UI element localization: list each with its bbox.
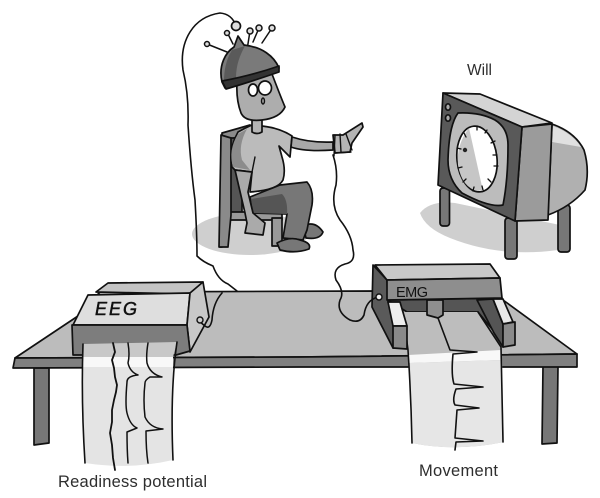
clock shaded part bbox=[458, 128, 483, 191]
table front edge bbox=[13, 354, 577, 368]
EEG noisy trace bbox=[110, 343, 117, 470]
chair seat bbox=[230, 212, 282, 220]
EMG left arm block bbox=[393, 326, 407, 349]
helmet dome bbox=[221, 36, 279, 88]
table bbox=[13, 291, 577, 445]
EMG trace bbox=[438, 318, 483, 450]
sensor heads bbox=[204, 42, 210, 46]
table left leg bbox=[34, 368, 49, 445]
TV shadow bbox=[420, 202, 560, 252]
table right leg bbox=[542, 366, 558, 444]
EEG readiness trace 2 bbox=[144, 343, 163, 463]
paper edges bbox=[82, 342, 177, 463]
TV side bbox=[515, 124, 552, 221]
head bbox=[237, 74, 285, 120]
clock ticks bbox=[457, 126, 498, 191]
EEG paper strip bbox=[82, 342, 177, 470]
EEG box top bbox=[73, 293, 190, 325]
back shoe bbox=[303, 224, 323, 238]
label: Readiness potential: Readiness potential bbox=[58, 473, 207, 491]
chair back bbox=[220, 125, 252, 247]
table top surface bbox=[15, 291, 577, 358]
helmet top ball bbox=[232, 22, 240, 30]
strapped hand bbox=[333, 123, 363, 153]
EMG label: EMG bbox=[396, 285, 428, 301]
EEG label: EEG bbox=[95, 299, 137, 319]
EEG readiness trace 1 bbox=[126, 343, 138, 463]
EMG paper edges bbox=[403, 312, 503, 443]
helmet sensors bbox=[204, 25, 275, 52]
thigh shade bbox=[251, 194, 287, 214]
television with clock bbox=[438, 93, 587, 259]
EEG box back strip bbox=[96, 282, 203, 294]
sensor stalks bbox=[207, 28, 272, 52]
TV front bbox=[438, 93, 522, 221]
lower arm bbox=[235, 170, 265, 235]
chair bbox=[219, 125, 282, 247]
clock face bbox=[454, 124, 500, 194]
paper upper part bbox=[82, 342, 177, 357]
EMG right arm block bbox=[503, 322, 515, 347]
EMG paper strip bbox=[403, 312, 504, 447]
EMG paper lower bbox=[410, 360, 504, 447]
EEG box side bbox=[187, 282, 209, 352]
EEG connector bbox=[197, 317, 203, 323]
EMG left side bbox=[372, 265, 407, 348]
EMG front bbox=[387, 278, 502, 300]
label: Movement: Movement bbox=[419, 462, 498, 480]
helmet shading bbox=[224, 46, 245, 82]
EMG connector bbox=[376, 294, 382, 300]
wire from helmet to EEG bbox=[182, 13, 237, 327]
neck bbox=[252, 120, 262, 134]
EMG right arm top bbox=[493, 299, 513, 324]
sleeve fold bbox=[252, 157, 255, 172]
EEG box front bbox=[72, 325, 190, 355]
raised arm bbox=[291, 137, 333, 151]
EMG right arm dark bbox=[477, 299, 503, 347]
EMG box bbox=[372, 264, 515, 450]
hand straps bbox=[334, 134, 352, 156]
EMG top bbox=[375, 264, 500, 280]
left eye bbox=[248, 84, 258, 96]
paper white band bbox=[82, 357, 173, 367]
TV top bbox=[443, 93, 552, 127]
right eye bbox=[258, 81, 272, 95]
TV legs bbox=[440, 188, 570, 259]
figure shadow bbox=[192, 213, 308, 255]
mouth bbox=[262, 98, 264, 104]
EMG recess bbox=[388, 298, 505, 345]
clock hand dot bbox=[463, 148, 467, 152]
chair front leg bbox=[272, 218, 282, 246]
seated person bbox=[204, 22, 363, 252]
chair back inner bbox=[230, 138, 242, 213]
EMG paper white band bbox=[408, 350, 501, 363]
paper lower part bbox=[82, 367, 173, 466]
TV rear highlight bbox=[552, 126, 581, 147]
TV knobs bbox=[446, 104, 450, 110]
TV screen bbox=[448, 113, 508, 206]
EMG left arm top bbox=[388, 302, 407, 326]
pants bbox=[250, 182, 312, 240]
chair rear post bbox=[219, 135, 231, 247]
torso shade bbox=[231, 129, 250, 170]
label: Will: Will bbox=[467, 62, 492, 79]
EMG center block bbox=[427, 300, 443, 318]
helmet rim bbox=[222, 66, 279, 89]
torso bbox=[231, 125, 292, 192]
front shoe bbox=[277, 239, 310, 252]
TV rear curved housing bbox=[548, 124, 587, 215]
EEG box bbox=[72, 282, 209, 355]
wire from hand to EMG bbox=[333, 155, 378, 321]
